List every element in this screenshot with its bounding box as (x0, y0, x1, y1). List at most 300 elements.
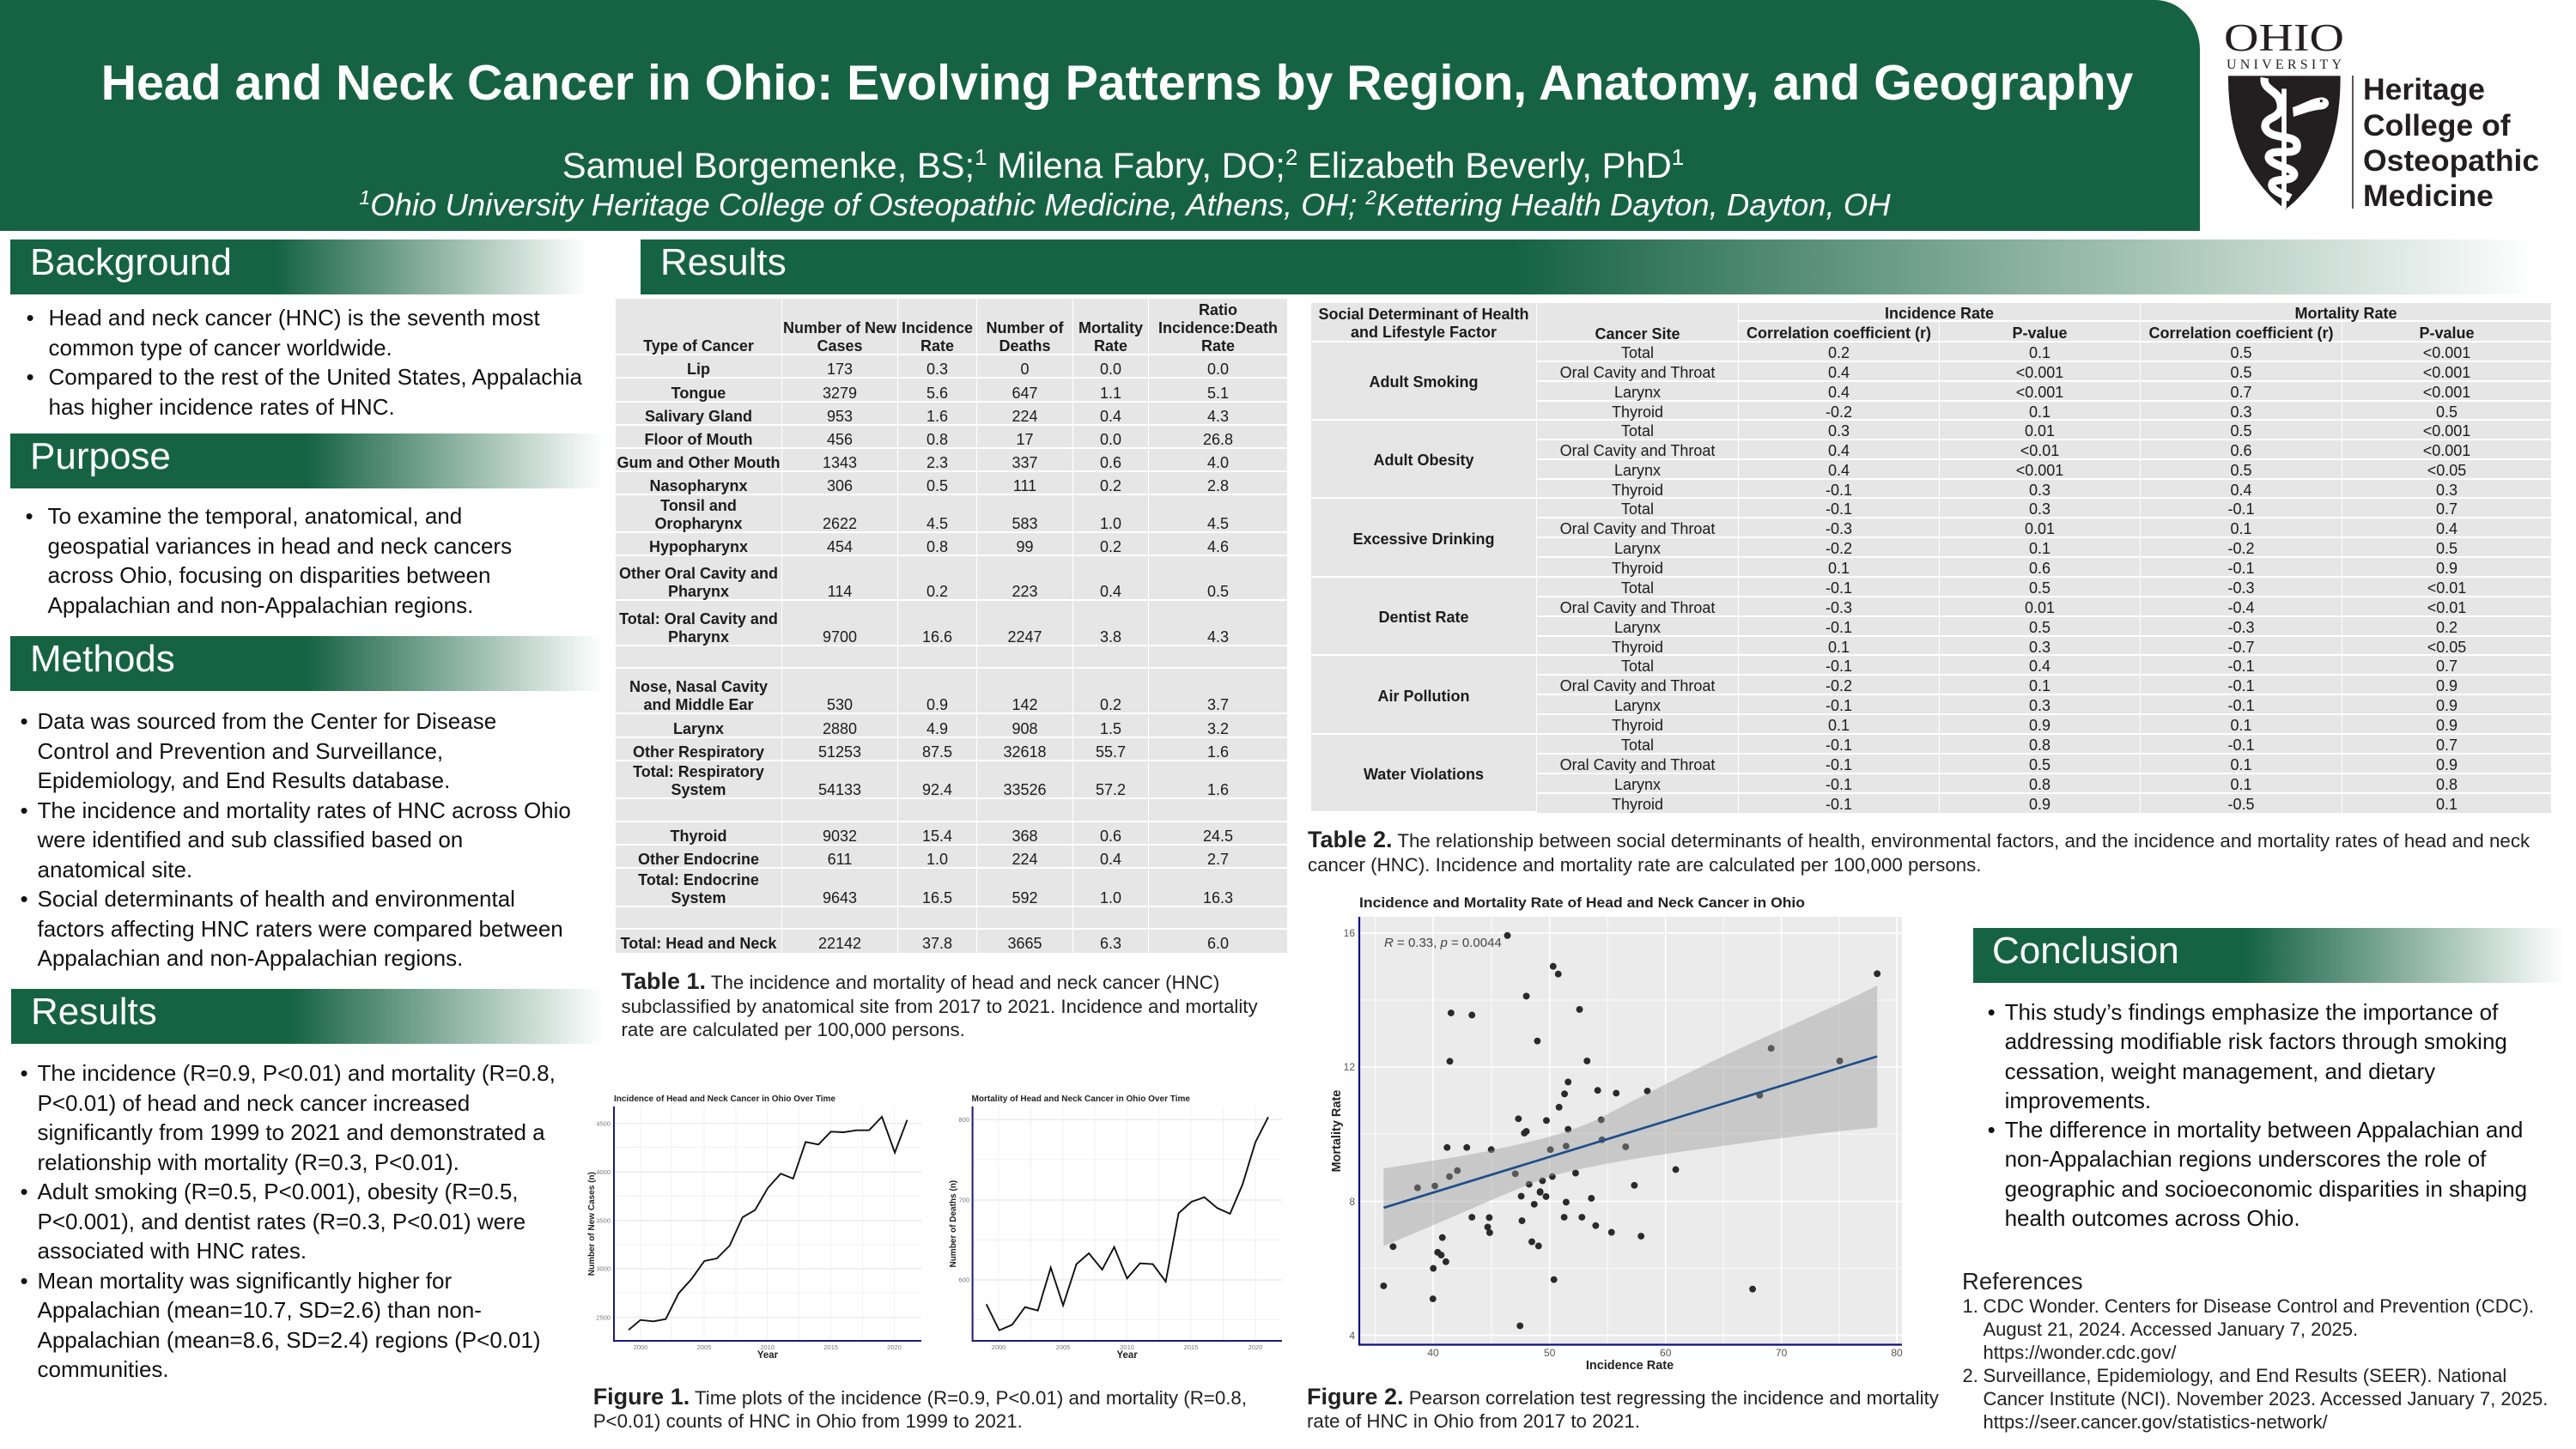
text: • (26, 305, 34, 330)
table 2: social determinants correlations: 0.9 (2436, 717, 2458, 734)
text block: purpose bullet: Appalachian and non-Appalachian regions. (48, 592, 473, 618)
table 2: social determinants correlations: 0.3 (2231, 403, 2252, 421)
scatter plot: incidence vs mortality: Incidence Rate (1586, 1359, 1674, 1373)
table 2: social determinants correlations: -0.1 (1826, 658, 1852, 675)
table 2: social determinants correlations: <0.001 (2423, 442, 2470, 459)
text block: conclusion bullets: The difference in mortality between Appalachian and (2005, 1117, 2523, 1143)
table 1: incidence and mortality by site: Other Endocrine (638, 851, 759, 868)
table 1: incidence and mortality by site: Other Oral Cavity and (619, 565, 778, 582)
line chart: incidence over time: 2000 (634, 1343, 647, 1351)
table 1: incidence and mortality by site: 16.5 (922, 889, 952, 906)
text: 1. (1963, 1295, 1978, 1317)
line chart: mortality over time: 2000 (992, 1343, 1005, 1351)
caption: table 2: Table 2. The relationship between social determinants of health, environmental factors, and the incidence and mortality rates of head and neck (1308, 827, 2530, 852)
line chart: mortality over time: 700 (958, 1197, 969, 1204)
caption: figure 1 (593, 1384, 1247, 1432)
logo: Ohio University Heritage College of Osteopathic Medicine (2224, 16, 2539, 213)
text: • (26, 503, 33, 529)
table 2: social determinants correlations: -0.1 (1826, 737, 1852, 754)
table 1: incidence and mortality by site: 0.2 (1100, 477, 1121, 494)
text block: purpose bullet: geospatial variances in head and neck cancers (48, 532, 512, 558)
table 2: social determinants correlations: -0.5 (2227, 795, 2255, 812)
table 2: social determinants correlations: 0.4 (2029, 658, 2050, 675)
text: • (1988, 999, 1996, 1025)
scatter plot: incidence vs mortality: 12 (1344, 1061, 1355, 1073)
table 2: social determinants correlations: and Lifestyle Factor (1351, 323, 1497, 340)
table 2: social determinants correlations: -0.1 (1826, 756, 1852, 773)
line chart: incidence over time: Incidence of Head and Neck Cancer in Ohio Over Time (614, 1094, 835, 1104)
table 1: incidence and mortality by site: 24.5 (1203, 828, 1233, 845)
text block: results bullets: P<0.001), and dentist rates (R=0.3, P<0.01) were (38, 1209, 526, 1234)
table 2: social determinants correlations: -0.1 (2227, 677, 2255, 694)
table 1: incidence and mortality by site: 1343 (823, 454, 857, 471)
table 1: incidence and mortality by site: 0.2 (1100, 696, 1121, 713)
table 1: incidence and mortality by site: 2247 (1007, 628, 1042, 646)
table 1: incidence and mortality by site: 1.1 (1100, 385, 1121, 402)
section heading: Background: Background (30, 241, 232, 283)
text block: purpose bullet (26, 503, 512, 618)
text: • (21, 886, 28, 912)
table 1: incidence and mortality by site: 3665 (1007, 935, 1042, 952)
line chart: mortality over time: Year (1116, 1350, 1138, 1361)
table 2: social determinants correlations: Larynx (1614, 619, 1661, 636)
table 2: social determinants correlations: 0.1 (2029, 344, 2050, 361)
table 1: incidence and mortality by site: Gum and Other Mouth (617, 454, 780, 471)
table 2: social determinants correlations: Total (1621, 500, 1654, 518)
table 2: social determinants correlations: 0.5 (2029, 619, 2050, 636)
table 2: social determinants correlations: 0.8 (2029, 776, 2050, 793)
table 2: social determinants correlations: <0.001 (2423, 364, 2470, 381)
text block: methods bullets: Epidemiology, and End Results database. (38, 767, 450, 793)
table 2: social determinants correlations: Oral Cavity and Throat (1560, 599, 1715, 616)
section heading: Purpose: Purpose (30, 435, 171, 477)
table 2: social determinants correlations: 0.9 (2436, 697, 2458, 714)
table 1: incidence and mortality by site: 5.6 (927, 385, 948, 402)
table 2: social determinants correlations: -0.2 (1826, 677, 1852, 694)
table 2: social determinants correlations: 0.4 (1828, 364, 1850, 381)
table 2: social determinants correlations: 0.2 (2436, 619, 2458, 636)
table 2: social determinants correlations: Oral Cavity and Throat (1560, 364, 1715, 381)
text block: conclusion bullets: cessation, weight management, and dietary (2005, 1058, 2435, 1084)
table 2: social determinants correlations: 0.3 (2029, 697, 2050, 714)
table 1: incidence and mortality by site: 55.7 (1096, 743, 1126, 761)
table 1: incidence and mortality by site: 0.3 (927, 361, 948, 378)
scatter plot: incidence vs mortality: Mortality Rate (1330, 1090, 1344, 1173)
text block: background bullets: has higher incidence rates of HNC. (48, 393, 395, 419)
table 1: incidence and mortality by site: Nasopharynx (649, 477, 748, 494)
table 1: incidence and mortality by site: 0.4 (1100, 408, 1121, 425)
table 2: social determinants correlations: Larynx (1614, 776, 1661, 793)
title: Head and Neck Cancer in Ohio: Evolving Patterns by Region, Anatomy, and Geography (101, 56, 2133, 111)
table 1: incidence and mortality by site: 3.2 (1207, 720, 1229, 737)
table 2: social determinants correlations: -0.1 (2227, 560, 2255, 577)
line chart: incidence over time (587, 1094, 921, 1361)
table 2: social determinants correlations: Oral Cavity and Throat (1560, 442, 1715, 459)
text block: conclusion bullets: This study’s findings emphasize the importance of (2005, 999, 2498, 1025)
table 2: social determinants correlations: -0.3 (2227, 579, 2255, 597)
table 2: social determinants correlations: -0.1 (1826, 776, 1852, 793)
section heading: Methods (10, 636, 603, 691)
line chart: incidence over time: 3500 (596, 1217, 611, 1225)
table 1: incidence and mortality by site: Mortality (1078, 319, 1143, 336)
table 1: incidence and mortality by site: Total: Endocrine (638, 871, 759, 888)
text: • (1988, 1117, 1996, 1143)
table 1: incidence and mortality by site: Thyroid (670, 828, 726, 845)
text block: reference list: CDC Wonder. Centers for Disease Control and Prevention (CDC). (1984, 1295, 2534, 1317)
text block: methods bullets: Appalachian and non-Appalachian regions. (38, 945, 463, 971)
table 1: incidence and mortality by site: 1.0 (1100, 515, 1121, 532)
table 1: incidence and mortality by site: Type of Cancer (643, 337, 754, 355)
table 1: incidence and mortality by site: 530 (827, 696, 853, 713)
table 2: social determinants correlations: Thyroid (1612, 403, 1663, 421)
table 1: incidence and mortality by site: 6.3 (1100, 935, 1121, 952)
caption: table 1 (622, 968, 1258, 1040)
line chart: mortality over time: 800 (958, 1116, 969, 1124)
table 2: social determinants correlations: 0.5 (2436, 403, 2458, 421)
caption: table 1: subclassified by anatomical site from 2017 to 2021. Incidence and mortality (622, 996, 1258, 1016)
table 2: social determinants correlations: -0.2 (1826, 540, 1852, 557)
table 1: incidence and mortality by site: Total: Oral Cavity and (619, 610, 778, 627)
table 2: social determinants correlations: 0.3 (2029, 639, 2050, 656)
text block: methods bullets: anatomical site. (38, 857, 192, 882)
table 2: social determinants correlations: 0.4 (1828, 442, 1850, 459)
table 1: incidence and mortality by site: 337 (1012, 454, 1038, 471)
table 1: incidence and mortality by site: 1.0 (1100, 889, 1121, 906)
scatter plot: incidence vs mortality: Incidence and Mortality Rate of Head and Neck Cancer in Ohio (1359, 894, 1805, 911)
table 2: social determinants correlations: Total (1621, 658, 1654, 675)
table 2: social determinants correlations: 0.7 (2231, 384, 2252, 401)
table 2: social determinants correlations: 0.3 (2436, 481, 2458, 498)
line chart: mortality over time: Mortality of Head and Neck Cancer in Ohio Over Time (972, 1094, 1190, 1104)
table 1: incidence and mortality by site: Number of (986, 319, 1063, 336)
table 1: incidence and mortality by site: 1.6 (927, 408, 948, 425)
table 1: incidence and mortality by site: 57.2 (1096, 781, 1126, 798)
table 2: social determinants correlations: 0.6 (2029, 560, 2050, 577)
logo: Ohio University Heritage College of Osteopathic Medicine: College of (2363, 108, 2511, 142)
table 1: incidence and mortality by site: 0.2 (927, 583, 948, 600)
text block: background bullets: Compared to the rest of the United States, Appalachia (48, 364, 582, 390)
table 1: incidence and mortality by site: 2622 (823, 515, 857, 532)
line chart: incidence over time: 2010 (760, 1343, 775, 1351)
table 1: incidence and mortality by site: 2.8 (1207, 477, 1229, 494)
table 2: social determinants correlations: 0.5 (2231, 462, 2252, 479)
table 1: incidence and mortality by site: 22142 (818, 935, 861, 952)
table 1: incidence and mortality by site: 1.6 (1207, 781, 1229, 798)
heading: references: References (1962, 1268, 2083, 1294)
text block: reference list: August 21, 2024. Accessed January 7, 2025. (1984, 1319, 2358, 1340)
table 1: incidence and mortality by site: 9032 (823, 828, 857, 845)
table 2: social determinants correlations: Total (1621, 737, 1654, 754)
text block: results bullets: Mean mortality was significantly higher for (38, 1267, 452, 1293)
text block: conclusion bullets: non-Appalachian regions underscores the role of (2005, 1146, 2486, 1172)
table 2: social determinants correlations: Larynx (1614, 697, 1661, 714)
table 2: social determinants correlations: 0.5 (2436, 540, 2458, 557)
table 1: incidence and mortality by site: 3279 (823, 385, 857, 402)
scatter plot: incidence vs mortality: 4 (1349, 1330, 1355, 1342)
table 2: social determinants correlations: 0.9 (2029, 717, 2050, 734)
table 2: social determinants correlations: 0.7 (2436, 500, 2458, 518)
table 2: social determinants correlations: 0.4 (2231, 481, 2252, 498)
table 2: social determinants correlations: <0.01 (2427, 579, 2466, 597)
table 2: social determinants correlations: <0.001 (2423, 344, 2470, 361)
table 1: incidence and mortality by site: 1.0 (927, 851, 948, 868)
text block: results bullets: relationship with mortality (R=0.3, P<0.01). (38, 1149, 459, 1174)
caption: table 2 (1308, 827, 2530, 876)
text block: methods bullets (21, 708, 571, 971)
scatter plot: incidence vs mortality (1330, 894, 1903, 1373)
table 2: social determinants correlations: Thyroid (1612, 717, 1663, 734)
text block: purpose bullet: To examine the temporal, anatomical, and (48, 503, 462, 529)
table 1: incidence and mortality by site: 2.7 (1207, 851, 1229, 868)
section heading: Methods: Methods (30, 638, 175, 680)
section heading: Purpose (10, 433, 603, 488)
table 2: social determinants correlations: -0.3 (1826, 520, 1852, 537)
caption: table 2: cancer (HNC). Incidence and mortality rate are calculated per 100,000 persons. (1308, 854, 1982, 876)
table 2: social determinants correlations: 0.9 (2436, 560, 2458, 577)
table 1: incidence and mortality by site: 0.6 (1100, 454, 1121, 471)
table 1: incidence and mortality by site: 592 (1012, 889, 1038, 906)
table 2: social determinants correlations: 0.01 (2025, 520, 2055, 537)
table 1: incidence and mortality by site: 368 (1012, 828, 1038, 845)
table 1: incidence and mortality by site: Rate (1094, 337, 1127, 355)
table 2: social determinants correlations: Correlation coefficient (r) (1747, 324, 1931, 342)
table 2: social determinants correlations: Larynx (1614, 540, 1661, 557)
text block: methods bullets: Data was sourced from the Center for Disease (38, 708, 496, 734)
table 1: incidence and mortality by site: 16.6 (922, 628, 952, 646)
table 2: social determinants correlations: 0.1 (2436, 795, 2458, 812)
scatter plot: incidence vs mortality: 8 (1349, 1196, 1355, 1208)
table 2: social determinants correlations: <0.001 (2423, 384, 2470, 401)
table 2: social determinants correlations: Total (1621, 344, 1654, 361)
table 1: incidence and mortality by site: 99 (1016, 538, 1034, 555)
table 1: incidence and mortality by site: 456 (827, 431, 853, 448)
table 1: incidence and mortality by site: Larynx (673, 720, 724, 737)
table 2: social determinants correlations: 0.1 (2029, 677, 2050, 694)
table 2: social determinants correlations: <0.001 (2016, 462, 2063, 479)
caption: figure 2: Figure 2. Pearson correlation test regressing the incidence and mortality (1307, 1384, 1939, 1410)
text: • (21, 1060, 28, 1086)
logo: Ohio University Heritage College of Osteopathic Medicine: UNIVERSITY (2227, 58, 2342, 72)
table 1: incidence and mortality by site: 2880 (823, 720, 857, 737)
table 2: social determinants correlations: Thyroid (1612, 639, 1663, 656)
table 1: incidence and mortality by site: 647 (1012, 385, 1038, 402)
text block: methods bullets: were identified and sub classified based on (38, 827, 463, 852)
text: • (21, 708, 28, 734)
line chart: incidence over time: 2015 (823, 1343, 838, 1351)
scatter plot: incidence vs mortality: 16 (1344, 927, 1355, 939)
text block: results bullets: The incidence (R=0.9, P<0.01) and mortality (R=0.8, (38, 1060, 556, 1086)
logo: Ohio University Heritage College of Osteopathic Medicine: Osteopathic (2363, 143, 2539, 178)
table 2: social determinants correlations: -0.2 (2227, 540, 2255, 557)
table 1: incidence and mortality by site: Hypopharynx (649, 538, 748, 555)
line chart: mortality over time: 2015 (1184, 1343, 1198, 1351)
table 2: social determinants correlations: -0.1 (1826, 500, 1852, 518)
logo: Ohio University Heritage College of Osteopathic Medicine: OHIO (2224, 16, 2344, 59)
table 1: incidence and mortality by site: Ratio (1199, 301, 1237, 318)
text block: conclusion bullets: geographic and socioeconomic disparities in shaping (2005, 1176, 2527, 1202)
table 2: social determinants correlations: -0.1 (2227, 500, 2255, 518)
table 1: incidence and mortality by site: 0.6 (1100, 828, 1121, 845)
table 1: incidence and mortality by site: 6.0 (1207, 935, 1229, 952)
table 1: incidence and mortality by site: Salivary Gland (645, 408, 752, 425)
section heading: Results (main) (641, 239, 2538, 294)
text block: methods bullets: Social determinants of health and environmental (38, 886, 515, 912)
table 1: incidence and mortality by site: 4.9 (927, 720, 948, 737)
table 2: social determinants correlations: -0.1 (1826, 795, 1852, 812)
table 2: social determinants correlations: 0.7 (2436, 737, 2458, 754)
table 1: incidence and mortality by site: 1.5 (1100, 720, 1121, 737)
line chart: incidence over time: 4500 (596, 1119, 611, 1128)
table 2: social determinants correlations: -0.7 (2227, 639, 2255, 656)
table 2: social determinants correlations: Correlation coefficient (r) (2148, 324, 2334, 342)
table 1: incidence and mortality by site: 4.0 (1207, 454, 1229, 471)
table 1: incidence and mortality by site: 142 (1012, 696, 1038, 713)
caption: figure 1: Figure 1. Time plots of the incidence (R=0.9, P<0.01) and mortality (R=0.8, (593, 1384, 1247, 1410)
table 1: incidence and mortality by site: 0.4 (1100, 851, 1121, 868)
table 2: social determinants correlations: 0.5 (2231, 422, 2252, 440)
text block: conclusion bullets: addressing modifiable risk factors through smoking (2005, 1028, 2507, 1054)
table 2: social determinants correlations: -0.1 (2227, 658, 2255, 675)
table 1: incidence and mortality by site: and Middle Ear (643, 696, 754, 713)
text block: results bullets: associated with HNC rates. (38, 1238, 307, 1264)
table 1: incidence and mortality by site: Floor of Mouth (645, 431, 752, 448)
table 2: social determinants correlations: 0.9 (2436, 756, 2458, 773)
table 2: social determinants correlations: 0.5 (2231, 364, 2252, 381)
table 1: incidence and mortality by site: 54133 (818, 781, 861, 798)
scatter plot: incidence vs mortality: 60 (1660, 1347, 1672, 1359)
table 1: incidence and mortality by site: 0 (1020, 361, 1029, 378)
section heading: Results (main): Results (660, 241, 787, 283)
table 2: social determinants correlations: Water Violations (1364, 766, 1484, 783)
table 1: incidence and mortality by site: Tonsil and (660, 497, 737, 514)
table 2: social determinants correlations: -0.1 (1826, 481, 1852, 498)
table 1: incidence and mortality by site: Rate (1201, 337, 1235, 355)
table 1: incidence and mortality by site: 9700 (823, 628, 857, 646)
table 2: social determinants correlations: 0.5 (2231, 344, 2252, 361)
table 1: incidence and mortality by site: 3.8 (1100, 628, 1121, 646)
header banner (0, 0, 2200, 231)
table 2: social determinants correlations: <0.01 (2020, 442, 2059, 459)
table 1: incidence and mortality by site: 0.2 (1100, 538, 1121, 555)
table 2: social determinants correlations: 0.5 (2029, 756, 2050, 773)
table 2: social determinants correlations: -0.3 (1826, 599, 1852, 616)
table 2: social determinants correlations: 0.01 (2025, 422, 2055, 440)
table 2: social determinants correlations: Cancer Site (1595, 325, 1680, 343)
table 2: social determinants correlations: <0.05 (2427, 462, 2466, 479)
scatter plot: incidence vs mortality: 80 (1891, 1347, 1903, 1359)
table 1: incidence and mortality by site: Other Respiratory (633, 743, 764, 761)
authors: Samuel Borgemenke, BS;1 Milena Fabry, DO;2 Elizabeth Beverly, PhD1 (562, 144, 1684, 185)
table 2: social determinants correlations: Excessive Drinking (1352, 530, 1495, 548)
table 2: social determinants correlations: Incidence Rate (1885, 304, 1994, 321)
table 1: incidence and mortality by site: 17 (1016, 431, 1034, 448)
table 2: social determinants correlations: 0.3 (2029, 481, 2050, 498)
text block: reference list (1963, 1295, 2548, 1433)
table 1: incidence and mortality by site: 611 (828, 851, 852, 868)
scatter plot: incidence vs mortality: R = 0.33, p = 0.0044 (1384, 936, 1502, 950)
table 2: social determinants correlations: -0.1 (1826, 619, 1852, 636)
line chart: incidence over time: Number of New Cases (n) (587, 1172, 597, 1276)
section heading: Results (left column): Results (31, 991, 157, 1033)
table 2: social determinants correlations: Oral Cavity and Throat (1560, 677, 1715, 694)
table 2: social determinants correlations: 0.9 (2436, 677, 2458, 694)
table 1: incidence and mortality by site: 0.5 (1207, 583, 1229, 600)
line chart: mortality over time: 2010 (1120, 1343, 1134, 1351)
table 1: incidence and mortality by site: 111 (1013, 477, 1036, 494)
table 2: social determinants correlations: 0.4 (1828, 462, 1850, 479)
table 1: incidence and mortality by site: System (671, 889, 726, 906)
table 1: incidence and mortality by site: 4.5 (927, 515, 948, 532)
caption: figure 1: P<0.01) counts of HNC in Ohio from 1999 to 2021. (593, 1410, 1023, 1432)
table 2: social determinants correlations: Thyroid (1612, 560, 1663, 577)
table 1: incidence and mortality by site: 5.1 (1207, 385, 1229, 402)
section heading: Conclusion (1973, 928, 2565, 983)
table 1: incidence and mortality by site: 92.4 (922, 781, 952, 798)
table 2: social determinants correlations: Thyroid (1612, 481, 1663, 498)
table 1: incidence and mortality by site: Nose, Nasal Cavity (629, 678, 768, 695)
table 2: social determinants correlations: 0.1 (2231, 776, 2252, 793)
table 2: social determinants correlations: 0.01 (2025, 599, 2055, 616)
table 2: social determinants correlations: Larynx (1614, 384, 1661, 401)
table 2: social determinants correlations: 0.1 (2029, 403, 2050, 421)
table 2: social determinants correlations: 0.2 (1828, 344, 1850, 361)
table 2: social determinants correlations: P-value (2420, 324, 2475, 342)
table 1: incidence and mortality by site: 0.0 (1100, 361, 1121, 378)
text: • (21, 797, 28, 822)
table 2: social determinants correlations: 0.1 (2029, 540, 2050, 557)
table 2: social determinants correlations: <0.001 (2423, 422, 2470, 440)
caption: figure 2 (1307, 1384, 1939, 1432)
table 1: incidence and mortality by site: Pharynx (668, 583, 729, 600)
text block: background bullets: common type of cancer worldwide. (48, 335, 392, 361)
line chart: incidence over time: Year (757, 1350, 779, 1361)
text: • (21, 1267, 28, 1293)
table 2: social determinants correlations: 0.9 (2029, 795, 2050, 812)
affiliations: 1Ohio University Heritage College of Osteopathic Medicine, Athens, OH; 2Kettering Health Dayton, Dayton, OH (359, 186, 1891, 222)
text: 2. (1963, 1365, 1978, 1386)
table 1: incidence and mortality by site: 454 (827, 538, 853, 555)
table 2: social determinants correlations: 0.7 (2436, 658, 2458, 675)
table 1: incidence and mortality by site: Incidence (902, 319, 973, 336)
table 2: social determinants correlations: P-value (2012, 324, 2068, 342)
caption: table 1: Table 1. The incidence and mortality of head and neck cancer (HNC) (622, 968, 1219, 994)
table 1: incidence and mortality by site: 0.9 (927, 696, 948, 713)
table 2: social determinants correlations (1311, 303, 2551, 813)
text block: conclusion bullets: improvements. (2005, 1088, 2151, 1113)
table 1: incidence and mortality by site: Incidence:Death (1158, 319, 1278, 336)
table 1: incidence and mortality by site: 16.3 (1203, 889, 1233, 906)
text block: conclusion bullets: health outcomes across Ohio. (2005, 1205, 2300, 1231)
table 1: incidence and mortality by site: 583 (1012, 515, 1038, 532)
table 1: incidence and mortality by site: 2.3 (927, 454, 948, 471)
text block: reference list: https://seer.cancer.gov/statistics-network/ (1984, 1411, 2328, 1433)
table 1: incidence and mortality by site: 173 (827, 361, 853, 378)
caption: figure 2: rate of HNC in Ohio from 2017 to 2021. (1307, 1410, 1640, 1432)
table 2: social determinants correlations: Total (1621, 422, 1654, 440)
text block: results bullets: Adult smoking (R=0.5, P<0.001), obesity (R=0.5, (38, 1179, 519, 1204)
table 1: incidence and mortality by site: 4.5 (1207, 515, 1229, 532)
section heading: Conclusion: Conclusion (1992, 930, 2179, 972)
logo: Ohio University Heritage College of Osteopathic Medicine: Heritage (2363, 72, 2485, 106)
table 1: incidence and mortality by site: 0.5 (927, 477, 948, 494)
table 1: incidence and mortality by site: 32618 (1003, 743, 1047, 761)
table 1: incidence and mortality by site: 953 (827, 408, 853, 425)
table 2: social determinants correlations: -0.1 (2227, 737, 2255, 754)
table 2: social determinants correlations: Mortality Rate (2294, 304, 2397, 321)
line chart: incidence over time: 4000 (596, 1168, 611, 1176)
table 2: social determinants correlations: 0.1 (2231, 717, 2252, 734)
table 2: social determinants correlations: 0.8 (2029, 737, 2050, 754)
